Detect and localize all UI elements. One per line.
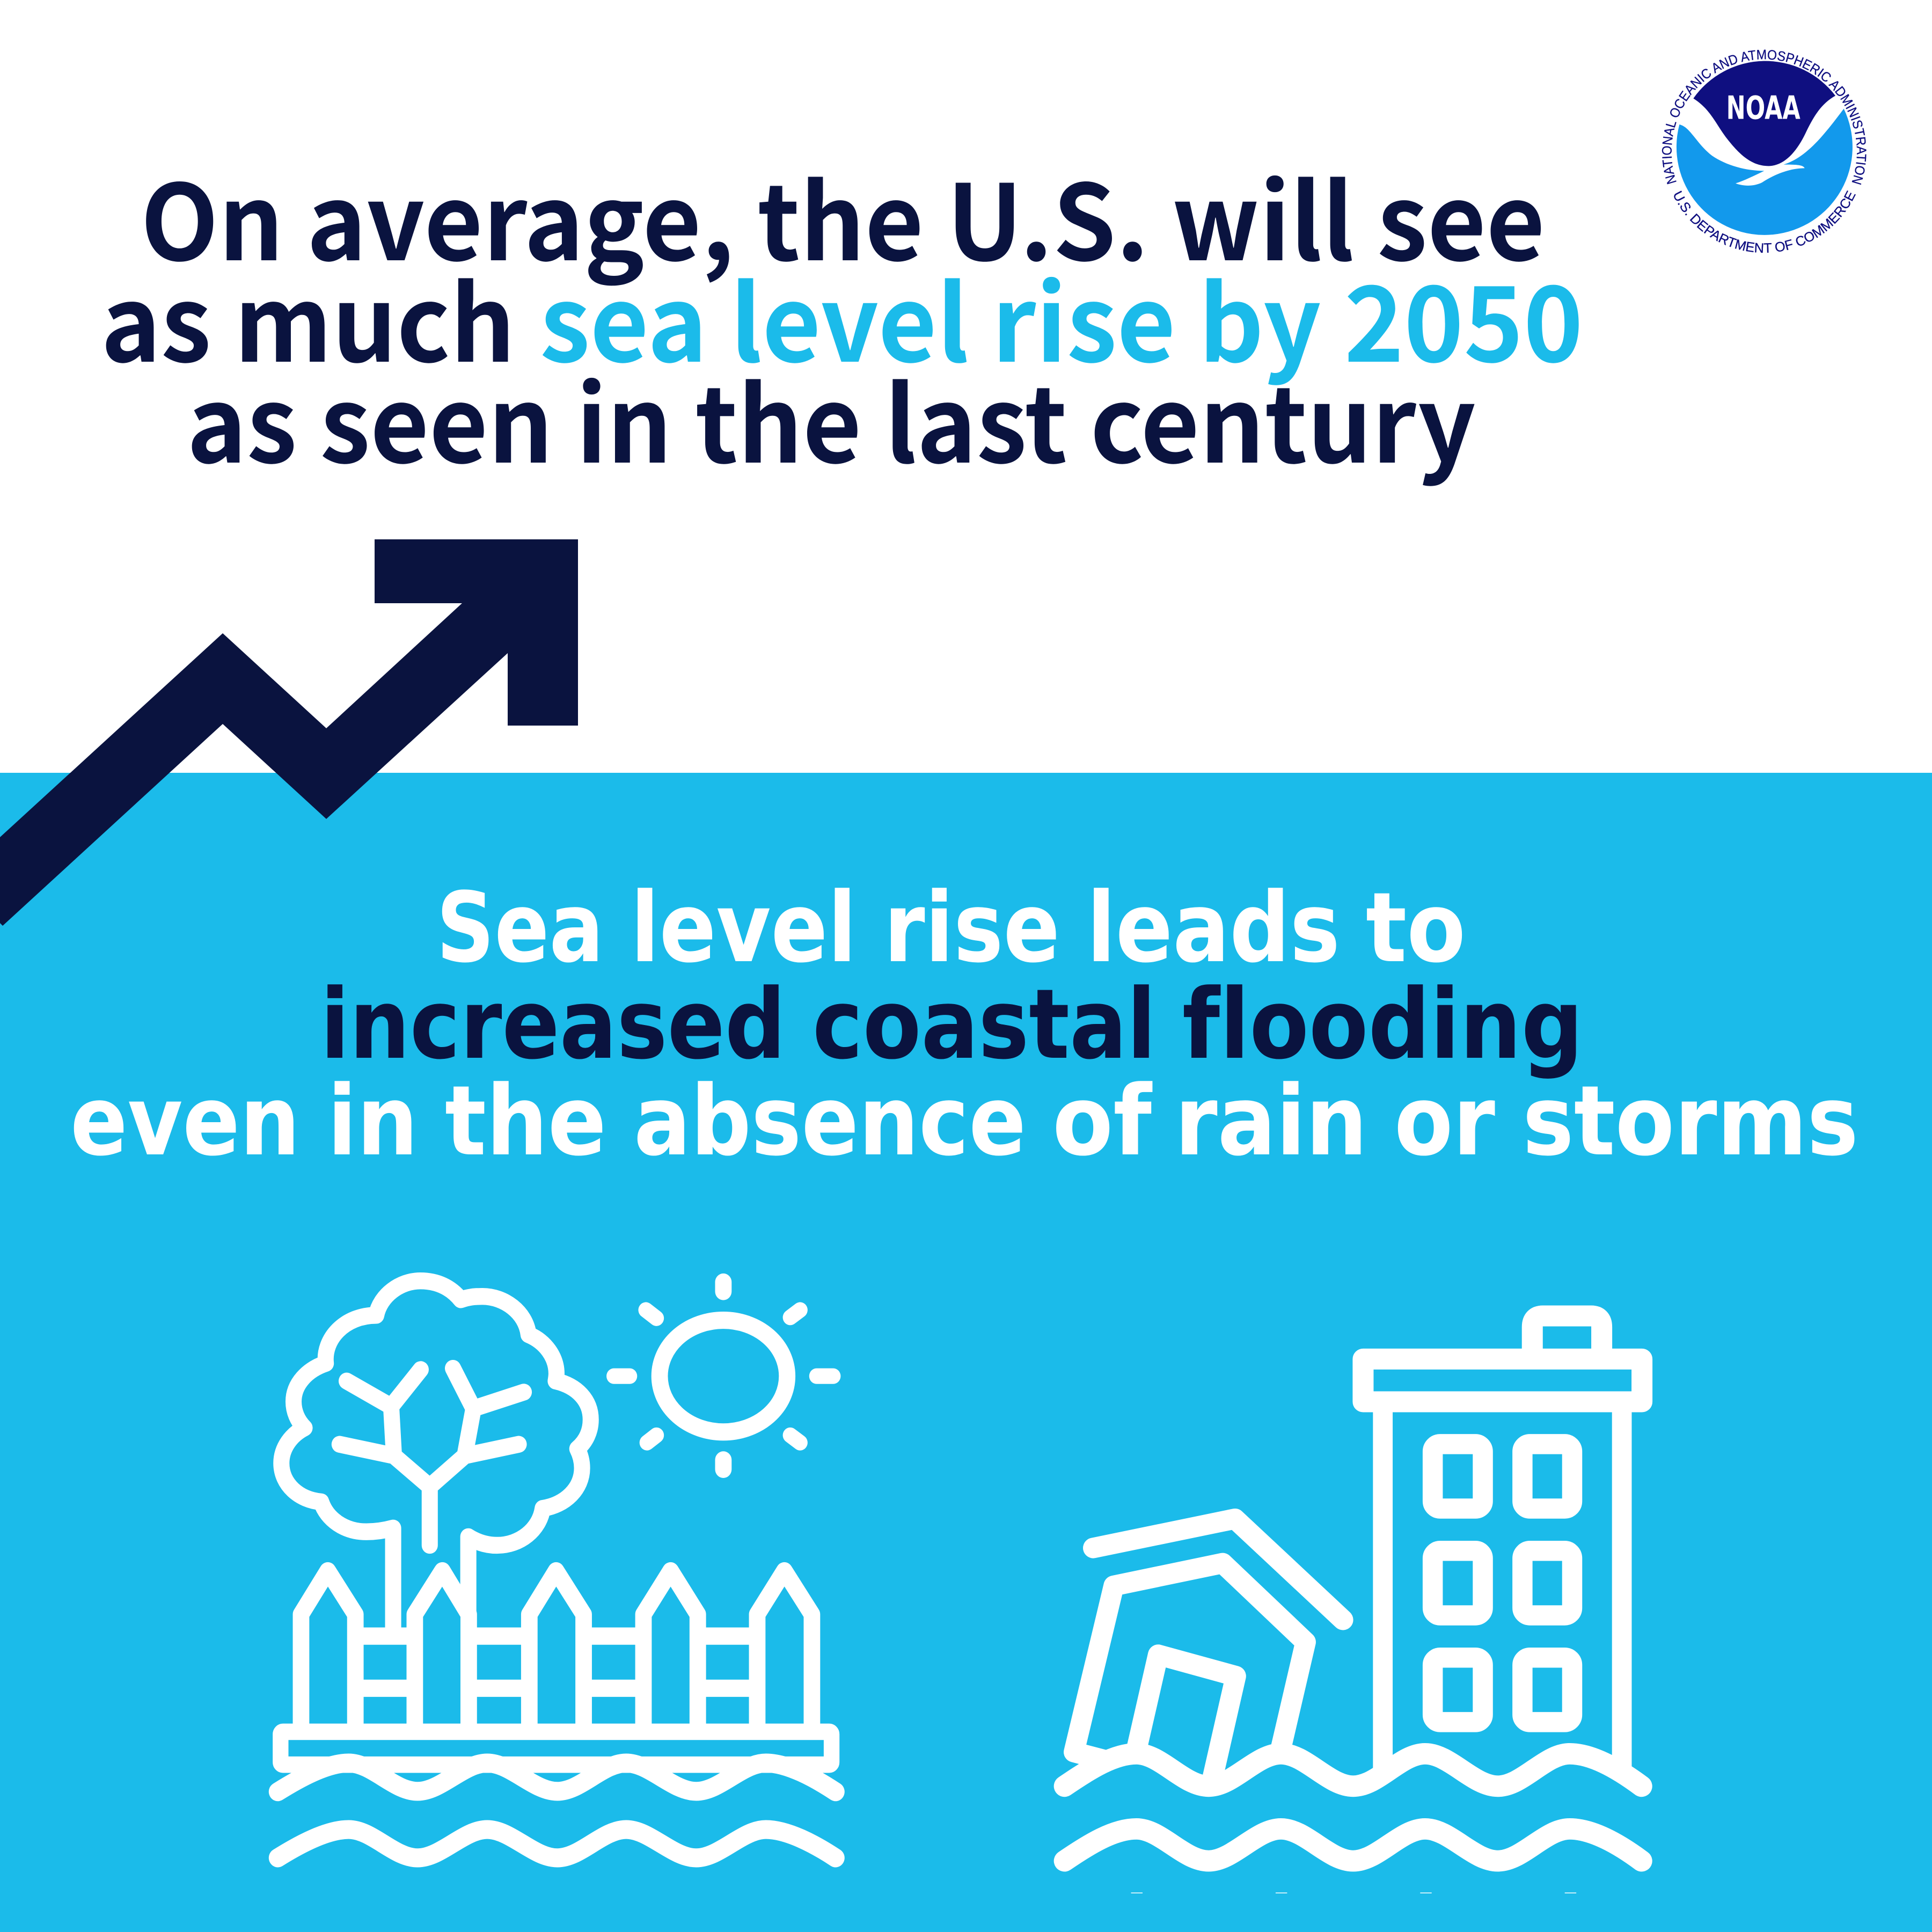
upper wave [1065, 1754, 1642, 1786]
sun [614, 1282, 833, 1469]
statement line 3 [70, 1065, 1858, 1177]
headline line 2 navy part: as much [101, 241, 515, 392]
icon: rising arrow [0, 539, 578, 926]
logo wordmark: NOAA [1726, 89, 1801, 126]
statement line 3: the [445, 1065, 606, 1177]
fence base [281, 1732, 832, 1765]
statement line 1 [436, 872, 1466, 984]
statement line 3: absence [634, 1065, 1026, 1177]
icon: tree, sun, fence and water [278, 1281, 836, 1858]
statement line 3: in [327, 1065, 418, 1177]
statement line 1: to [1366, 872, 1466, 984]
logo ring text bottom: U.S. DEPARTMENT OF COMMERCE [1674, 190, 1856, 253]
statement line 2 [320, 969, 1583, 1081]
lower wave [1065, 1829, 1642, 1861]
statement line 3: even [70, 1065, 300, 1177]
title: main headline [101, 140, 1583, 493]
fence [301, 1571, 812, 1731]
house walls [1074, 1563, 1306, 1760]
lower wave [278, 1829, 836, 1858]
house door [1136, 1655, 1236, 1779]
statement line 2: coastal [813, 969, 1156, 1081]
statement line 2: flooding [1182, 969, 1583, 1081]
logo dark blue sky [1693, 61, 1835, 166]
statement line 3: storms [1523, 1065, 1858, 1177]
logo ring text top: NATIONAL OCEANIC AND ATMOSPHERIC ADMINISTRATION [1662, 49, 1867, 185]
tree branches [340, 1368, 524, 1545]
headline line 3: as seen in the last century [187, 342, 1476, 493]
statement line 1: level [631, 872, 857, 984]
statement line 3: rain [1175, 1065, 1367, 1177]
house roof [1093, 1519, 1343, 1620]
building windows [1433, 1444, 1572, 1722]
icon: flooded house and building [1065, 1316, 1642, 1893]
tree crown and trunk [281, 1281, 591, 1628]
heading: coastal flooding statement [70, 872, 1858, 1177]
logo light blue water [1677, 109, 1853, 235]
icon: NOAA logo [1662, 49, 1867, 253]
statement line 2: increased [320, 969, 786, 1081]
statement line 3: or [1394, 1065, 1495, 1177]
statement line 3: of [1052, 1065, 1153, 1177]
building walls [1383, 1402, 1622, 1775]
headline line 2 highlighted part: sea level rise by 2050 [540, 241, 1583, 392]
statement line 1: Sea [436, 872, 604, 984]
statement line 1: rise [884, 872, 1060, 984]
statement line 1: leads [1087, 872, 1340, 984]
panel: blue lower background [0, 773, 1932, 1932]
headline line 1: On average, the U.S. will see [141, 140, 1545, 291]
building roof and chimney [1363, 1316, 1642, 1402]
upper wave [278, 1763, 836, 1792]
